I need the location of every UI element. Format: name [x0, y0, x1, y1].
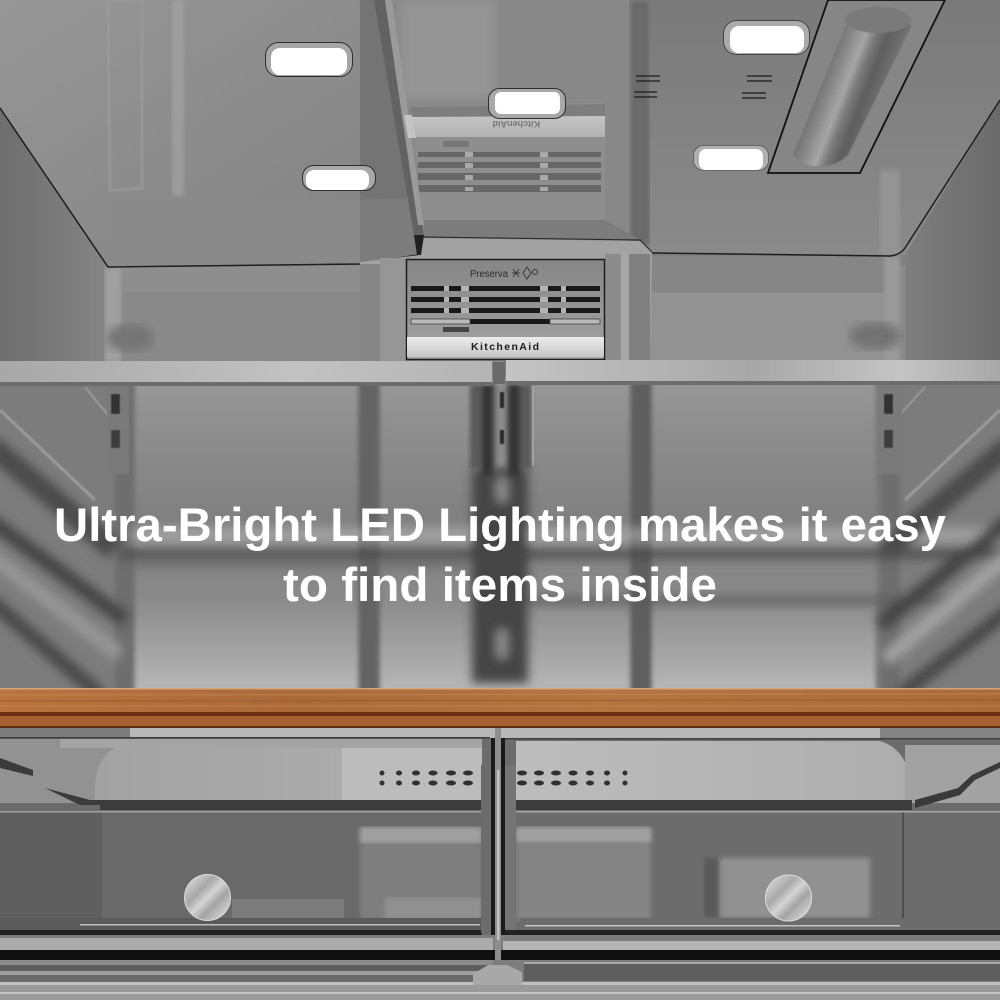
- centre bracket slots: [500, 386, 534, 466]
- shelf: left glass shelf front: [0, 361, 492, 386]
- icon: drawer vent dots: [380, 770, 628, 786]
- panel: drawer rails and base: [0, 728, 1000, 1000]
- panel: back wall upper: [105, 256, 905, 362]
- icon: tube recess: [768, 0, 945, 173]
- title: [54, 498, 946, 611]
- icon: LED light 5: [694, 146, 768, 170]
- panel: wood shelf: [0, 688, 1000, 728]
- side rail highlights: [0, 387, 1000, 500]
- centre post under shelf: [470, 384, 532, 476]
- panel: left crisper drawer: [0, 737, 495, 935]
- brackets under shelf: [107, 384, 902, 474]
- panel: lower back wall behind shelf: [0, 378, 1000, 695]
- panel: Preserva control panel: [406, 260, 604, 360]
- panel: right ceiling: [650, 0, 1000, 256]
- panel: behind drawers: [0, 727, 1000, 739]
- title: Ultra-Bright LED Lighting makes it easy: [54, 498, 946, 551]
- icon: LED light 1: [266, 42, 352, 76]
- panel: right crisper drawer: [501, 738, 1000, 935]
- shelf: right glass shelf front: [506, 360, 1000, 385]
- icon: LED light 2: [302, 166, 376, 190]
- icon: LED light 3: [488, 88, 566, 118]
- panel: left ceiling: [0, 0, 420, 267]
- icon: left drawer knob: [184, 874, 230, 920]
- panel: left side wall: [0, 108, 108, 362]
- glass edge strip: [374, 0, 424, 255]
- vent slats: [411, 286, 600, 332]
- icon: right drawer knob: [766, 875, 812, 921]
- panel: centre ceiling: [392, 0, 650, 250]
- title: to find items inside: [283, 558, 717, 611]
- reflected vent plate: [360, 103, 652, 362]
- reflected vent plate: KitchenAid: [492, 119, 540, 129]
- text: KitchenAid logo: KitchenAid: [471, 341, 539, 353]
- text: Preserva label: Preserva: [470, 269, 508, 280]
- panel: right side wall: [905, 100, 1000, 362]
- icon: LED light 4: [724, 20, 810, 54]
- icon: dash vents: [634, 76, 772, 98]
- icon: Preserva symbols: [512, 267, 538, 279]
